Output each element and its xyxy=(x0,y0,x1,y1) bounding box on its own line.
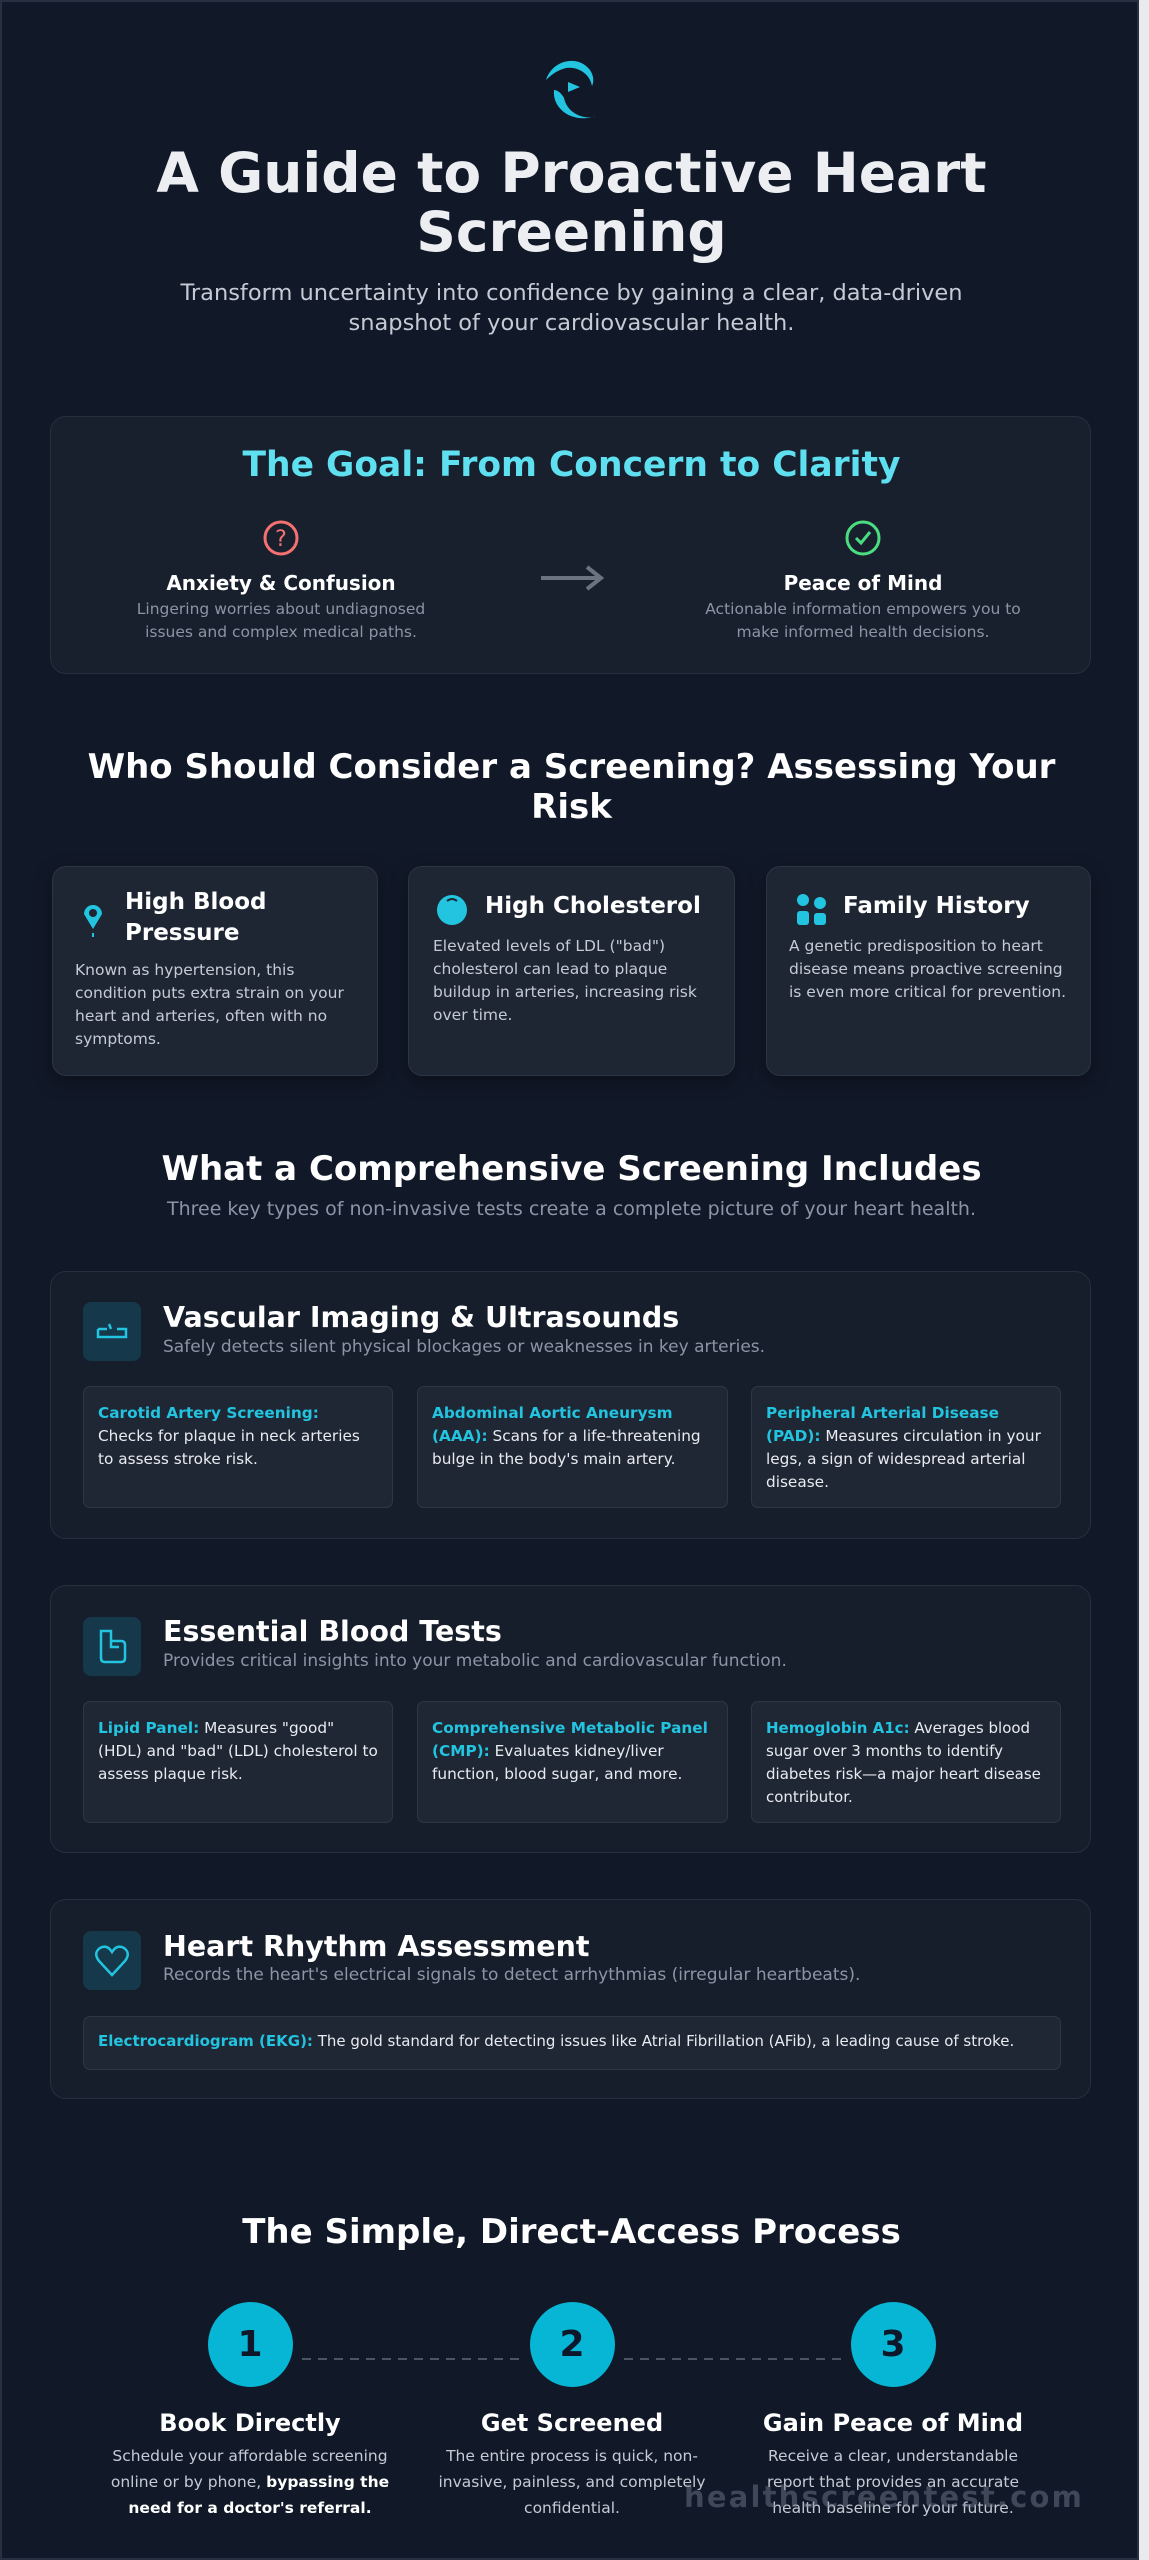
concern column: Lingering worries about undiagnosed xyxy=(137,600,425,618)
subcard: lipid xyxy=(83,1701,393,1823)
panel: vascular: Safely detects silent physical blockages or weaknesses in key arteries. xyxy=(163,1337,765,1357)
card: cholesterol: High Cholesterol xyxy=(485,893,701,919)
card: blood pressure: Pressure xyxy=(125,920,240,946)
heading: who should consider: Who Should Consider a Screening? Assessing Your xyxy=(88,747,1055,787)
heading: comprehensive screening: What a Comprehensive Screening Includes xyxy=(161,1149,982,1189)
clarity column: Actionable information empowers you to xyxy=(705,600,1021,618)
icon: vial xyxy=(83,1617,141,1676)
card: blood pressure: High Blood xyxy=(125,889,266,915)
subcard: carotid: Checks for plaque in neck arteries to assess stroke risk. xyxy=(98,1427,360,1468)
icon: pin xyxy=(84,905,102,937)
watermark: healthscreentest.com xyxy=(684,2480,1084,2514)
clarity column: make informed health decisions. xyxy=(737,623,989,641)
icon: check xyxy=(846,520,880,556)
panel: blood tests: Essential Blood Tests xyxy=(163,1615,502,1648)
panel: vascular xyxy=(50,1271,1091,1539)
subcard: CMP xyxy=(417,1701,728,1823)
goal heading: The Goal: From Concern to Clarity xyxy=(243,445,900,485)
step 2: The entire process is quick, non-invasive, painless, and completely confidential. xyxy=(438,2447,706,2517)
card: blood pressure: Known as hypertension, this condition puts extra strain on your heart and arteries, often with no symptoms. xyxy=(75,961,344,1048)
icon: heart xyxy=(83,1931,141,1990)
panel: goal xyxy=(50,416,1091,674)
step 3 xyxy=(763,2302,1023,2517)
heading: who should consider xyxy=(88,747,1056,827)
arrow xyxy=(541,566,604,590)
concern column: Anxiety & Confusion xyxy=(166,571,396,595)
subtitle xyxy=(180,280,963,336)
step 3: Gain Peace of Mind xyxy=(763,2409,1023,2437)
subcard: A1c: Hemoglobin A1c: Averages blood sugar over 3 months to identify diabetes risk—a major heart disease contributor. xyxy=(766,1719,1041,1806)
icon: question: ? xyxy=(275,527,287,552)
card: blood pressure xyxy=(52,866,378,1076)
concern column xyxy=(137,520,425,641)
icon: drop xyxy=(437,895,467,925)
card: cholesterol xyxy=(408,866,735,1076)
dashed connectors xyxy=(302,2358,841,2360)
title: Screening xyxy=(416,200,727,264)
subcard: EKG xyxy=(83,2016,1061,2070)
panel: heart rhythm: Heart Rhythm Assessment xyxy=(163,1930,590,1963)
step 1: Schedule your affordable screening online or by phone, bypassing the need for a doctor's referral. xyxy=(111,2447,389,2517)
concern column: issues and complex medical paths. xyxy=(145,623,417,641)
icon: question xyxy=(264,520,298,556)
step 1: 1 xyxy=(237,2324,263,2365)
card: family history: Family History xyxy=(843,893,1030,919)
subtitle: snapshot of your cardiovascular health. xyxy=(349,310,794,336)
step 1 xyxy=(111,2302,389,2517)
subcard: EKG: Electrocardiogram (EKG): The gold standard for detecting issues like Atrial Fibrillation (AFib), a leading cause of stroke. xyxy=(98,2032,1014,2050)
logo icon xyxy=(546,60,596,118)
card: cholesterol: Elevated levels of LDL ("bad") cholesterol can lead to plaque buildup in arteries, increasing risk over time. xyxy=(433,937,697,1024)
title: A Guide to Proactive Heart xyxy=(156,141,987,205)
step 2: 2 xyxy=(559,2324,585,2365)
panel: heart rhythm: Records the heart's electrical signals to detect arrhythmias (irregular heartbeats). xyxy=(163,1965,860,1985)
subcard: PAD: Peripheral Arterial Disease (PAD): Measures circulation in your legs, a sign of widespread arterial disease. xyxy=(766,1404,1041,1491)
step 3: 3 xyxy=(880,2324,906,2365)
card: family history: A genetic predisposition to heart disease means proactive screening is even more critical for prevention. xyxy=(789,937,1066,1001)
subcard: lipid: Lipid Panel: Measures "good" (HDL) and "bad" (LDL) cholesterol to assess plaque risk. xyxy=(98,1719,378,1783)
subcard: carotid xyxy=(83,1386,393,1508)
clarity column xyxy=(705,520,1021,641)
panel: heart rhythm xyxy=(50,1899,1091,2099)
clarity column: Peace of Mind xyxy=(784,571,942,595)
subcard: A1c xyxy=(751,1701,1061,1823)
icon: family xyxy=(797,894,826,925)
icon: ultrasound xyxy=(83,1302,141,1361)
subcard: CMP: Comprehensive Metabolic Panel (CMP): Evaluates kidney/liver function, blood sugar, and more. xyxy=(432,1719,708,1783)
subcard: PAD xyxy=(751,1386,1061,1508)
subheading: Three key types of non-invasive tests create a complete picture of your heart health. xyxy=(167,1198,976,1220)
panel: vascular: Vascular Imaging & Ultrasounds xyxy=(163,1301,679,1334)
card: family history xyxy=(766,866,1091,1076)
title xyxy=(156,141,987,264)
panel: blood tests xyxy=(50,1585,1091,1853)
step 2 xyxy=(438,2302,706,2517)
step 2: Get Screened xyxy=(481,2409,663,2437)
step 1: Book Directly xyxy=(159,2409,341,2437)
heading: process: The Simple, Direct-Access Process xyxy=(242,2212,901,2252)
subcard: AAA: Abdominal Aortic Aneurysm (AAA): Scans for a life-threatening bulge in the body's main artery. xyxy=(432,1404,701,1468)
subcard: carotid: Carotid Artery Screening: xyxy=(98,1404,319,1422)
step 3: Receive a clear, understandable report that provides an accurate health baseline for your future. xyxy=(767,2447,1019,2517)
panel: blood tests: Provides critical insights into your metabolic and cardiovascular function. xyxy=(163,1651,787,1671)
subtitle: Transform uncertainty into confidence by gaining a clear, data-driven xyxy=(180,280,963,306)
subcard: AAA xyxy=(417,1386,728,1508)
heading: who should consider: Risk xyxy=(531,787,612,827)
